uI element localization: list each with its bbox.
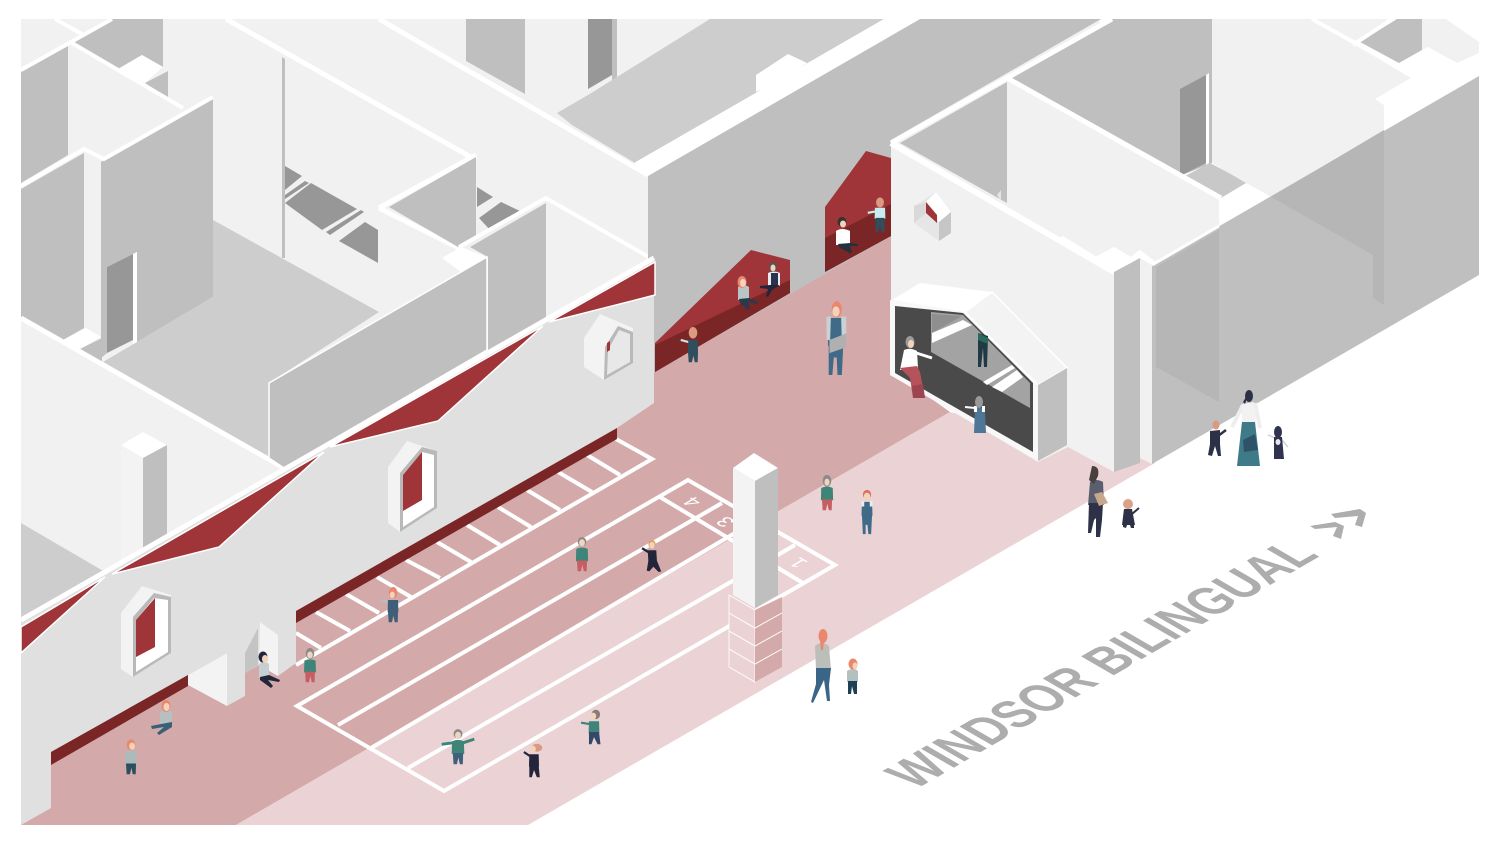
hopscotch numbers: 4 xyxy=(678,493,707,510)
red nook with children xyxy=(655,250,790,372)
red nook upper xyxy=(825,151,891,272)
child 9 xyxy=(524,744,542,777)
child 13 seated in nook xyxy=(760,262,780,297)
dark red plinth bands xyxy=(51,428,617,765)
child 12 seated in nook xyxy=(738,276,758,310)
ground lettering: WINDSOR BILINGUAL: WINDSOR BILINGUAL xyxy=(872,531,1331,796)
child 3 seated xyxy=(258,652,280,688)
ground arrow chevrons xyxy=(1310,509,1366,539)
right building grey wall xyxy=(1152,76,1479,464)
child overalls in courtyard xyxy=(861,490,873,534)
entrance pier xyxy=(188,622,278,706)
upper left rooms xyxy=(21,19,379,458)
woman with orange braid xyxy=(811,629,831,703)
child 7 running xyxy=(642,540,661,572)
white roof lines xyxy=(21,19,648,468)
roof edge line xyxy=(21,258,654,620)
right building upper rooms xyxy=(891,19,1411,272)
child 11 in nook xyxy=(681,327,698,362)
child 1 xyxy=(125,739,137,774)
red roof triangles xyxy=(21,262,655,653)
hopscotch and parking lines xyxy=(296,439,835,791)
right building front xyxy=(891,143,1152,472)
child 10 xyxy=(581,710,600,744)
person behind window xyxy=(978,333,988,367)
child in window foreground xyxy=(965,396,986,433)
hopscotch numbers xyxy=(684,497,808,567)
child 2 seated xyxy=(151,700,172,735)
small window on right building xyxy=(914,192,951,241)
base roof plane xyxy=(21,19,1100,622)
right building top corner xyxy=(1311,19,1479,63)
woman with book xyxy=(1088,466,1108,537)
child in courtyard xyxy=(821,475,833,510)
upper centre rooms xyxy=(466,19,884,163)
large window alcove xyxy=(890,283,1067,461)
child 14 seated in nook xyxy=(836,217,858,253)
window: middle xyxy=(388,441,437,532)
window: right xyxy=(584,314,633,380)
long grey wall xyxy=(648,19,1101,376)
woman with teal skirt xyxy=(1232,390,1260,466)
child holding hand xyxy=(1208,420,1226,456)
left column xyxy=(122,432,167,548)
lower left grey floor xyxy=(21,523,105,620)
left building facade xyxy=(21,260,654,825)
seated woman in window xyxy=(900,336,932,398)
column edge xyxy=(282,57,285,258)
child 15 in nook xyxy=(868,197,885,232)
child 4 xyxy=(304,648,316,682)
window: left xyxy=(121,586,171,677)
child 6 xyxy=(576,537,588,571)
white band xyxy=(634,19,920,176)
courtyard slats xyxy=(285,166,520,263)
hopscotch numbers: 1 xyxy=(784,554,813,571)
child 8 arms out xyxy=(442,729,474,764)
playground: dark pink ground xyxy=(21,200,950,825)
centre rooms xyxy=(269,157,654,468)
playground: light pink ground xyxy=(236,412,1155,825)
door: left room xyxy=(107,252,137,353)
hopscotch numbers: 3 xyxy=(711,513,740,530)
hopscotch pillar xyxy=(729,453,782,682)
teacher with tablet xyxy=(827,301,846,375)
child 5 overalls xyxy=(381,587,398,622)
child in dark dress xyxy=(1122,499,1139,528)
child with orange hair xyxy=(847,658,858,694)
child in navy dress xyxy=(1268,426,1288,459)
